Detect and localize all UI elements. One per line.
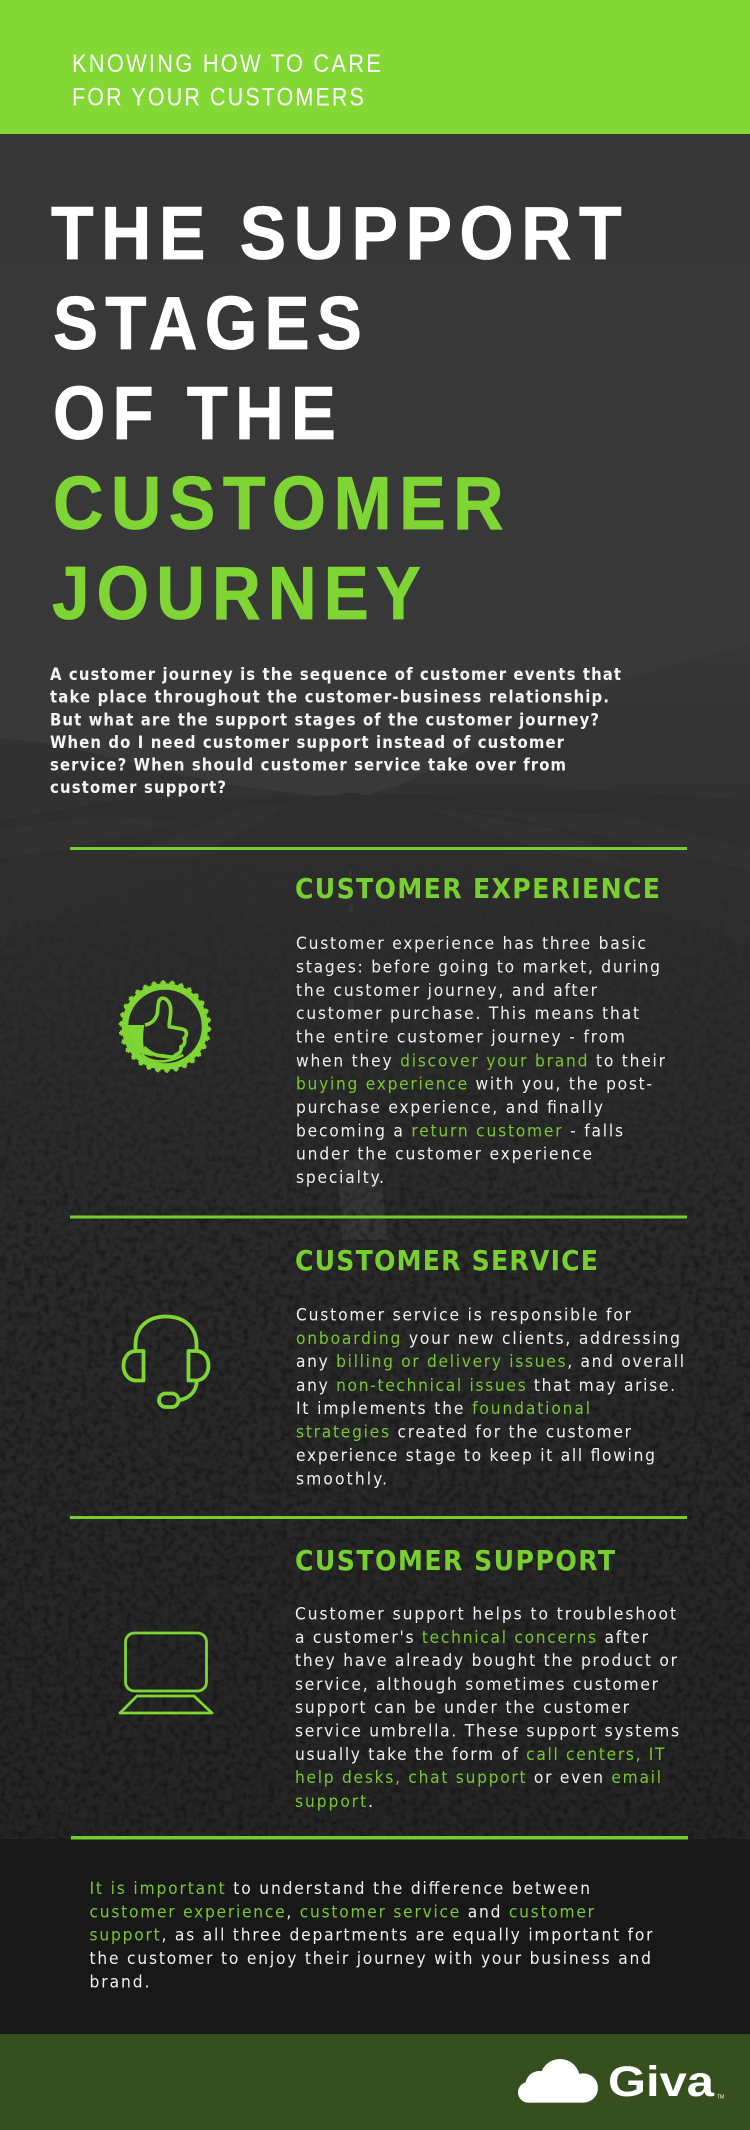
body text: customer experience: the entire customer journey - from (296, 1028, 625, 1048)
heading: customer service: CUSTOMER SERVICE (295, 1244, 598, 1277)
body text: customer service: any non-technical issues that may arise. (296, 1376, 675, 1396)
title: OF THE (53, 371, 343, 455)
header subtitle: FOR YOUR CUSTOMERS (72, 84, 366, 112)
heading: customer support: CUSTOMER SUPPORT (295, 1544, 616, 1577)
footer band (0, 2034, 750, 2130)
body text: customer experience: under the customer experience (296, 1145, 592, 1165)
body text: customer service: It implements the foundational (296, 1399, 590, 1419)
title: JOURNEY (52, 551, 428, 635)
body text: customer experience: specialty. (296, 1168, 384, 1188)
body text: customer experience: the customer journey, and after (296, 981, 598, 1001)
intro paragraph (50, 665, 621, 797)
intro paragraph: A customer journey is the sequence of customer events that (50, 665, 621, 684)
title (51, 191, 629, 635)
body text: customer service: onboarding your new clients, addressing (296, 1329, 680, 1349)
body text: customer support: service umbrella. These support systems (295, 1722, 679, 1742)
body text: customer support: usually take the form of call centers, IT (295, 1745, 665, 1765)
intro paragraph: But what are the support stages of the customer journey? (50, 710, 599, 729)
body text: customer support: help desks, chat support or even email (295, 1768, 661, 1788)
body text: customer support: a customer's technical concerns after (295, 1628, 649, 1648)
intro paragraph: customer support? (50, 778, 226, 797)
body text: customer experience (296, 934, 666, 1188)
body text: customer support: support. (295, 1792, 373, 1812)
title: THE SUPPORT (51, 191, 629, 275)
body text: customer experience: when they discover your brand to their (296, 1051, 666, 1071)
logo: Giva cloud: Giva (608, 2058, 715, 2106)
header band (0, 0, 750, 134)
body text: customer experience: becoming a return customer - falls (296, 1121, 623, 1141)
title: CUSTOMER (53, 461, 511, 545)
body text: customer service (296, 1306, 684, 1490)
heading: customer experience: CUSTOMER EXPERIENCE (295, 872, 660, 905)
closing text: the customer to enjoy their journey with your business and (90, 1949, 651, 1969)
body text: customer service: Customer service is responsible for (296, 1306, 632, 1326)
body text: customer experience: stages: before going to market, during (296, 958, 660, 978)
body text: customer experience: purchase experience, and finally (296, 1098, 603, 1118)
intro paragraph: take place throughout the customer-business relationship. (50, 688, 609, 707)
body text: customer support: Customer support helps to troubleshoot (295, 1604, 676, 1624)
body text: customer service: smoothly. (296, 1470, 387, 1490)
intro paragraph: When do I need customer support instead of customer (50, 733, 565, 752)
closing text (90, 1879, 653, 1992)
panel: customer support (70, 1516, 687, 1812)
body text: customer service: any billing or delivery issues, and overall (296, 1352, 684, 1372)
body text: customer experience: buying experience with you, the post- (296, 1075, 652, 1095)
title: STAGES (53, 281, 369, 365)
closing text: support, as all three departments are equally important for (90, 1926, 653, 1946)
panel: customer service (70, 1216, 687, 1490)
panel: closing note (0, 1836, 750, 2034)
body text: customer support: support can be under the customer (295, 1698, 630, 1718)
body text: customer support (295, 1604, 679, 1812)
body text: customer experience: customer purchase. This means that (296, 1004, 639, 1024)
panel: customer experience (70, 847, 687, 1188)
body text: customer service: strategies created for the customer (296, 1422, 632, 1442)
header subtitle: KNOWING HOW TO CARE (72, 50, 383, 78)
logo: Giva cloud (518, 2058, 724, 2106)
icon: headset (124, 1316, 208, 1407)
body text: customer support: service, although sometimes customer (295, 1675, 659, 1695)
body text: customer support: they have already bought the product or (295, 1651, 678, 1671)
closing text: brand. (90, 1972, 150, 1992)
header subtitle (72, 50, 383, 112)
icon: thumbs up badge (120, 981, 210, 1072)
closing text: customer experience, customer service and customer (90, 1902, 595, 1922)
icon: computer (120, 1633, 212, 1713)
logo: Giva cloud: TM (717, 2094, 724, 2100)
body text: customer service: experience stage to keep it all flowing (296, 1446, 655, 1466)
body text: customer experience: Customer experience has three basic (296, 934, 646, 954)
intro paragraph: service? When should customer service take over from (50, 756, 566, 774)
closing text: It is important to understand the difference between (90, 1879, 590, 1899)
